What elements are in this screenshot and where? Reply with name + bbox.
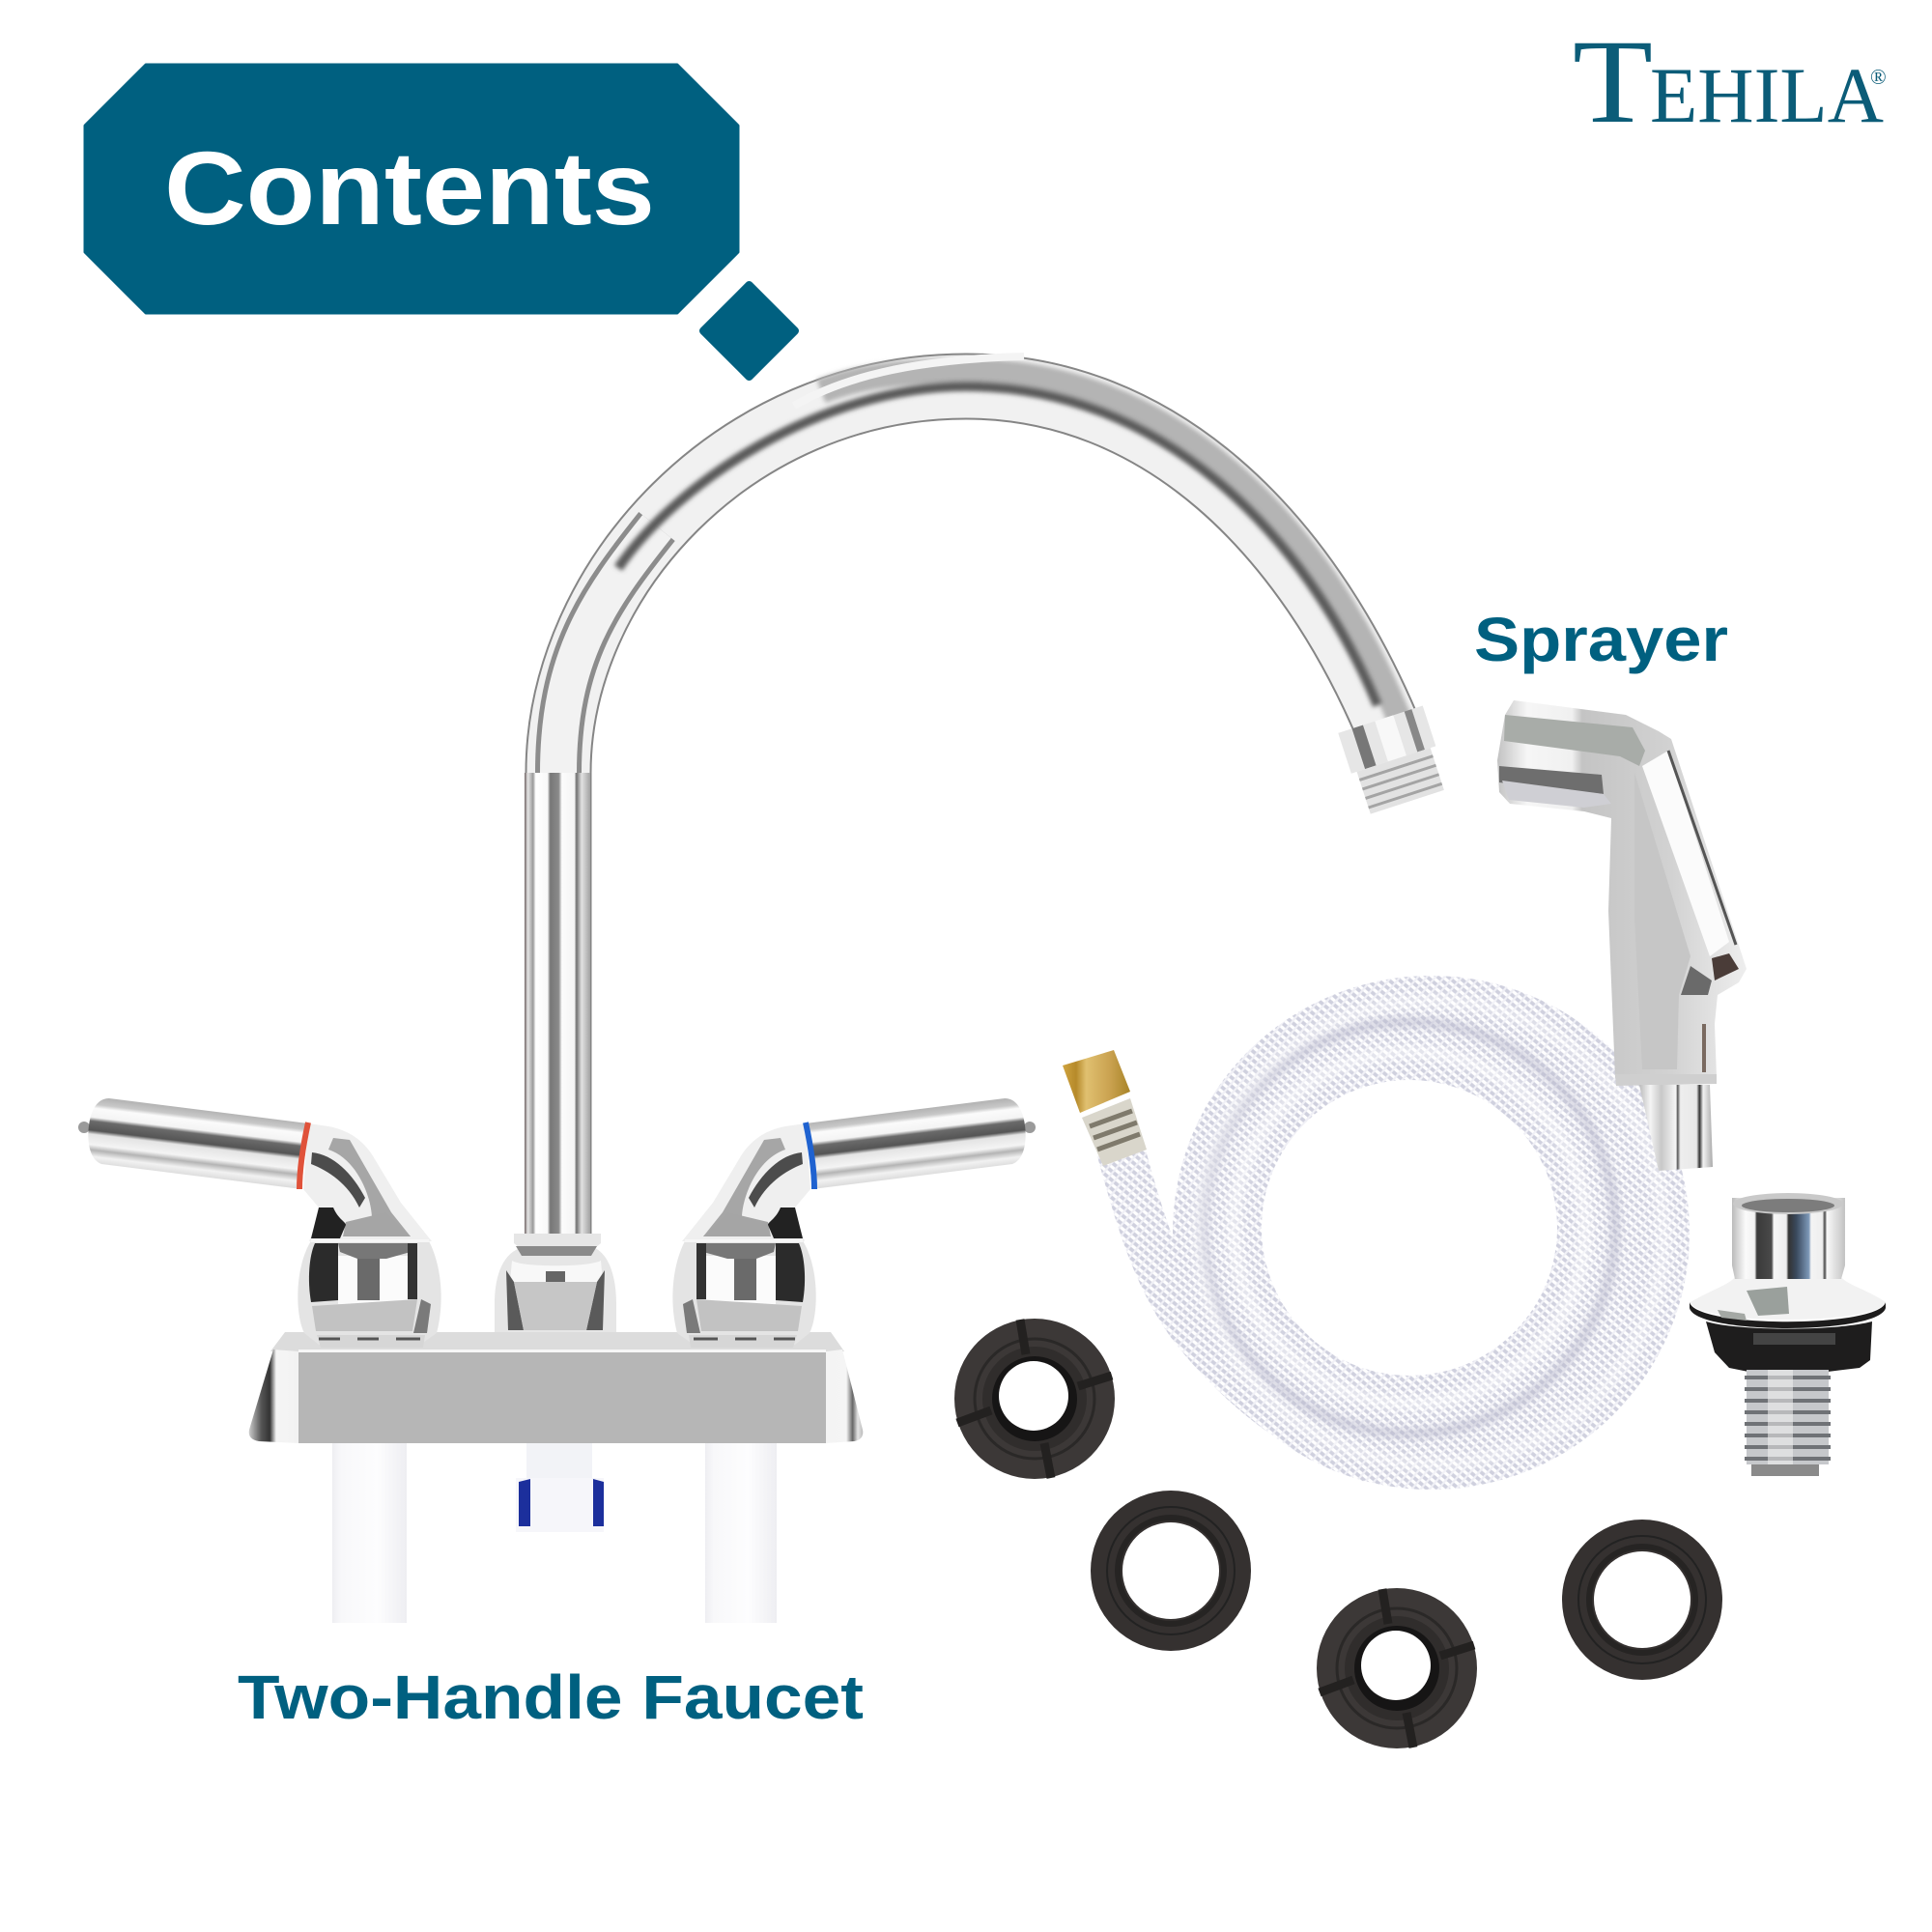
sprayer hose collar: [1639, 1085, 1713, 1171]
banner diamond accent: [703, 285, 795, 377]
center quick-connect fitting: [516, 1443, 604, 1532]
rubber washer 2: [1562, 1520, 1722, 1680]
deck plate: [249, 1332, 863, 1443]
right mounting stud: [705, 1443, 777, 1623]
brand logo: Tehila: ®: [1870, 65, 1887, 89]
label: Two-Handle Faucet: Two-Handle Faucet: [238, 1662, 864, 1732]
faucet spout: [525, 356, 1401, 1246]
brand logo: Tehila: T: [1573, 15, 1653, 148]
rubber washer 1: [1091, 1491, 1251, 1651]
heading banner: Contents: [85, 65, 738, 313]
center base of spout: [495, 1234, 616, 1348]
brand logo: Tehila: [1573, 15, 1887, 148]
sprayer head: [1497, 700, 1747, 1086]
left mounting stud: [332, 1443, 407, 1623]
left handle (hot): [78, 1098, 441, 1348]
right handle (cold): [672, 1098, 1036, 1348]
sprayer mounting base: [1690, 1193, 1886, 1476]
spout threaded nozzle: [1338, 705, 1450, 816]
brand logo: Tehila: EHILA: [1650, 51, 1884, 139]
locking nut 1: [954, 1319, 1115, 1479]
heading banner: Contents: Contents: [164, 129, 655, 246]
label: Sprayer: Sprayer: [1474, 605, 1728, 674]
locking nut 2: [1317, 1588, 1477, 1748]
hose brass fitting: [1063, 1050, 1147, 1166]
braided hose: [1121, 976, 1690, 1490]
